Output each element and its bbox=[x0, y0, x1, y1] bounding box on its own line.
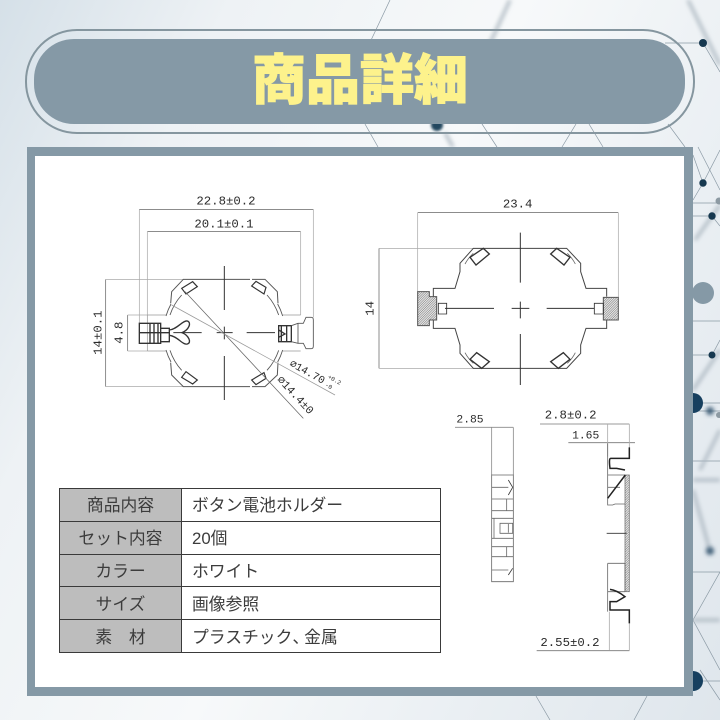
dimension text side view: 2.85 bbox=[456, 415, 484, 427]
dimension text section view: 1.65 bbox=[572, 431, 599, 443]
drawing: front view with terminals bbox=[91, 195, 343, 418]
centre mark section view bbox=[607, 532, 627, 535]
dimension text rear view bbox=[364, 197, 532, 316]
dimension text front view: +0.2 bbox=[326, 374, 343, 387]
hatched plate section view bbox=[625, 475, 629, 592]
drawing: side view bbox=[455, 415, 513, 582]
side body bbox=[492, 475, 513, 582]
holder outline front view bbox=[171, 279, 278, 387]
dimension lines front view bbox=[106, 209, 313, 387]
upper contact section view bbox=[608, 443, 625, 505]
lower contact section view bbox=[608, 563, 625, 612]
specification table: ホワイト bbox=[192, 562, 259, 581]
leader lines front view bbox=[185, 292, 303, 418]
specification table bbox=[59, 488, 441, 653]
dimension text section view: 2.8±0.2 bbox=[545, 409, 597, 423]
specification table: 20個 bbox=[192, 529, 227, 548]
dimension text front view: 22.8±0.2 bbox=[196, 195, 256, 209]
dimension lines rear view bbox=[379, 213, 618, 368]
centre marks front view bbox=[173, 266, 275, 400]
dimension text rear view: 14 bbox=[364, 301, 378, 316]
dimension text front view: ⌀14.4±0 bbox=[274, 375, 315, 418]
contact tabs front view bbox=[182, 281, 266, 385]
drawing: rear view with hatched terminals bbox=[364, 197, 618, 385]
title: 商品詳細 bbox=[252, 51, 468, 111]
dimension text section view bbox=[540, 409, 600, 650]
dimension text front view: ⌀14.70 bbox=[287, 358, 326, 387]
specification table: サイズ bbox=[96, 595, 145, 614]
specification table: セット内容 bbox=[79, 529, 162, 548]
latch strokes side view bbox=[508, 480, 513, 575]
contact tabs rear view bbox=[470, 248, 570, 368]
hatched terminal right rear view bbox=[603, 297, 618, 320]
wing clip left front view bbox=[169, 321, 190, 344]
specification table: 商品内容 bbox=[87, 496, 154, 515]
dimension text front view: -0 bbox=[324, 382, 334, 391]
dimension side view bbox=[455, 427, 513, 475]
specification table: カラー bbox=[95, 562, 146, 581]
retaining arcs front view bbox=[166, 295, 283, 370]
dimension text rear view: 23.4 bbox=[503, 197, 532, 211]
dimension text front view bbox=[91, 195, 343, 418]
centre marks rear view bbox=[445, 233, 594, 385]
hatched terminal left rear view bbox=[418, 292, 437, 326]
panel: white content area bbox=[35, 156, 684, 687]
specification table: 素 材 bbox=[95, 628, 146, 647]
title banner bbox=[34, 39, 685, 124]
dimensions section view bbox=[537, 424, 635, 651]
specification table: ボタン電池ホルダー bbox=[192, 496, 343, 515]
specification table: 画像参照 bbox=[192, 595, 259, 614]
specification table: プラスチック、金属 bbox=[192, 628, 338, 647]
holder outline rear view bbox=[433, 248, 607, 368]
terminal left front view bbox=[139, 323, 170, 343]
dimension text front view: 20.1±0.1 bbox=[194, 217, 254, 231]
terminal blocks rear view bbox=[438, 303, 603, 314]
dimension text front view: 14±0.1 bbox=[91, 310, 105, 355]
terminal right front view bbox=[279, 326, 291, 342]
drawing: section view bbox=[537, 409, 635, 651]
dimension text section view: 2.55±0.2 bbox=[540, 636, 600, 650]
title banner outline bbox=[25, 29, 695, 134]
dimension text front view: 4.8 bbox=[113, 322, 127, 344]
panel: frame bbox=[27, 147, 693, 696]
